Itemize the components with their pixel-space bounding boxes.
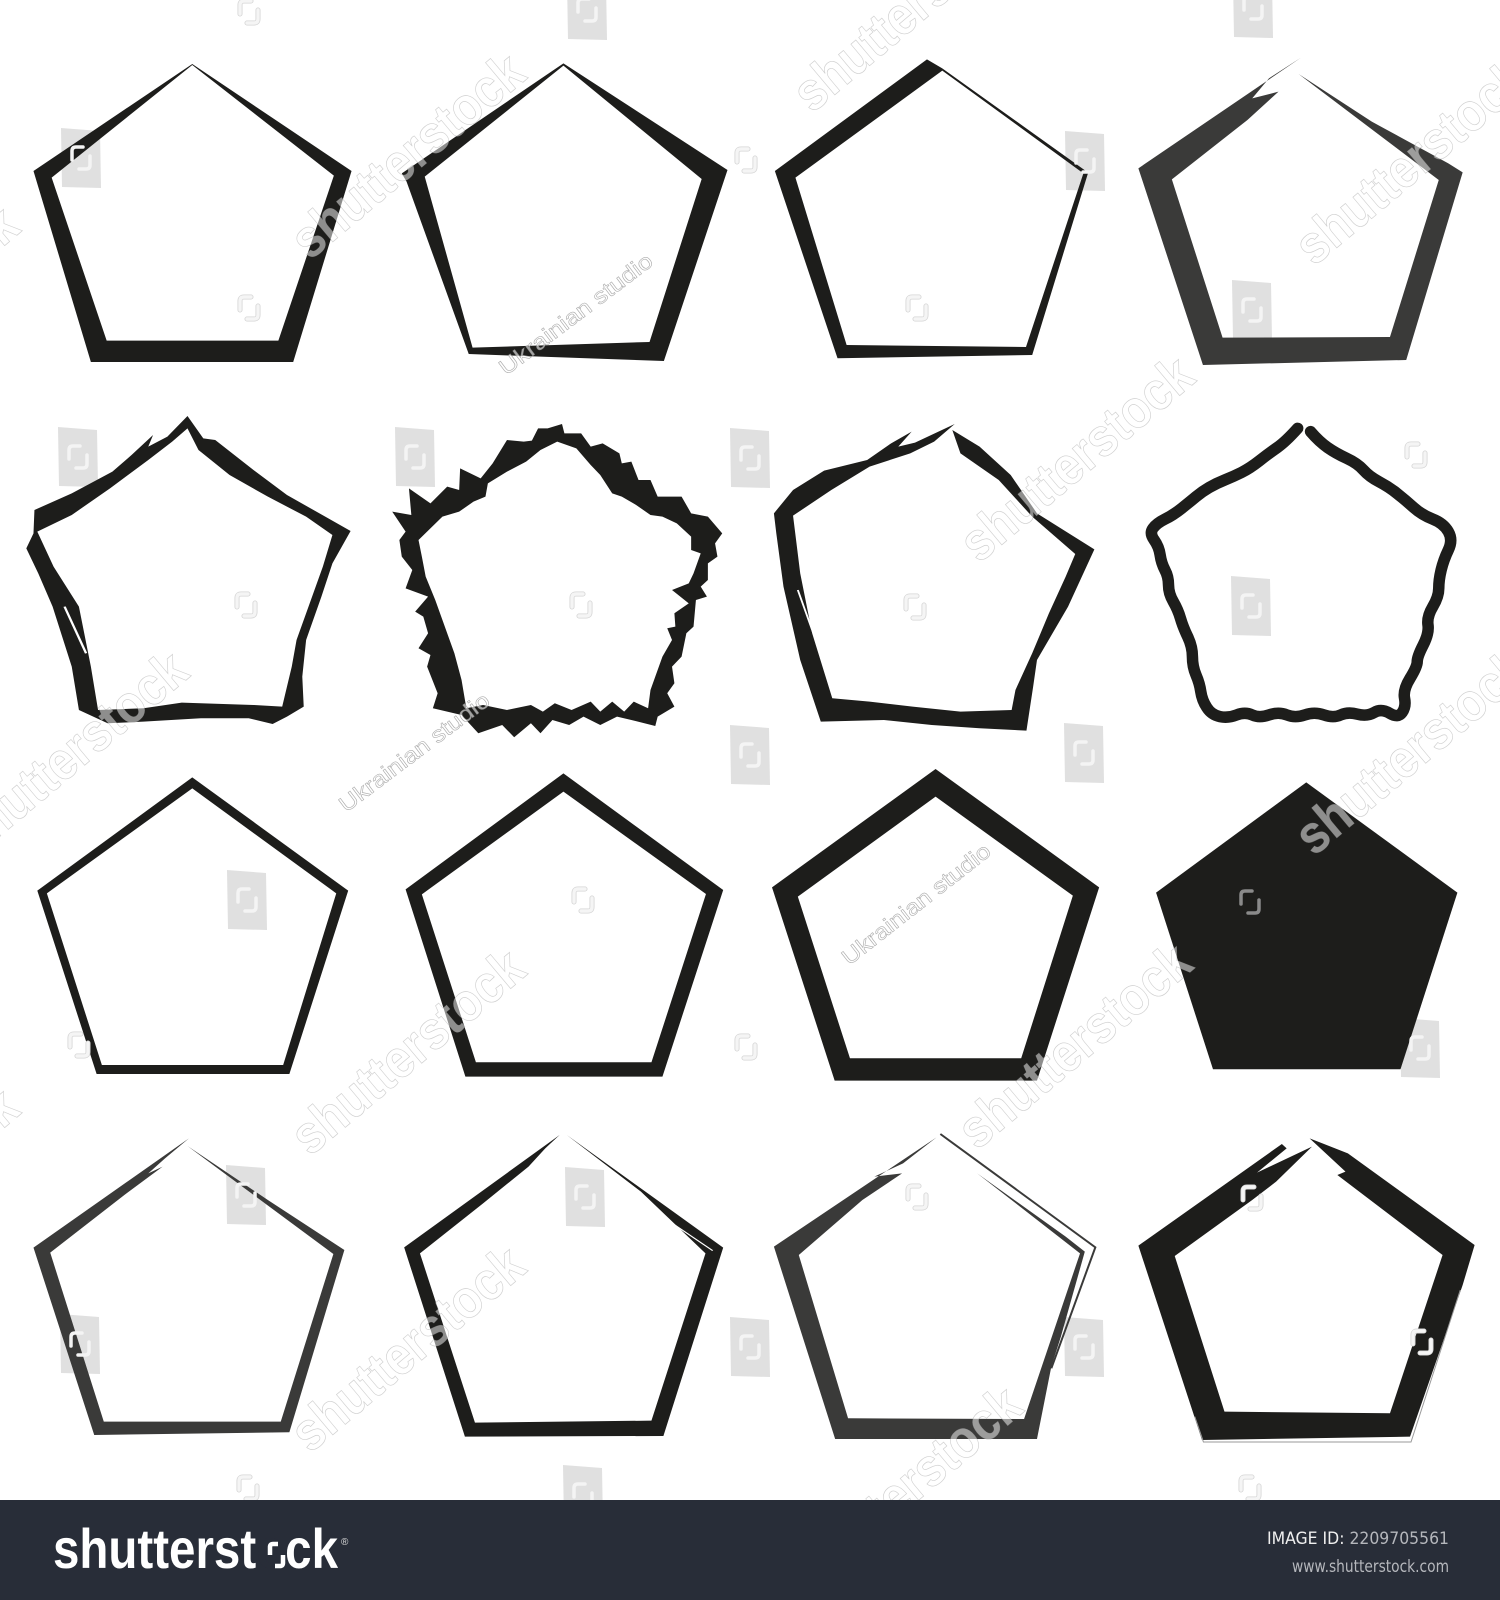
watermark Ukrainian studio diagonal text: Ukrainian studio (837, 838, 995, 970)
image id: IMAGE ID: 2209705561 (1267, 1529, 1449, 1548)
watermark Ukrainian studio diagonal text: Ukrainian studio (334, 687, 494, 817)
watermark Ukrainian studio diagonal text (334, 248, 995, 970)
pentagon row 2 column 2: jagged spiky frame (392, 424, 722, 737)
pentagon row 1 column 3: open top thin right frame (775, 59, 1088, 358)
pentagon row 3 column 1: thin regular frame (37, 777, 348, 1074)
footer band (0, 1500, 1500, 1600)
watermark shutterstock diagonal text: shutterstock (776, 1373, 1034, 1600)
pentagon row 2 column 4: wavy frame (1151, 428, 1451, 717)
pentagon row 1 column 2: skewed tapered frame (402, 63, 727, 361)
watermark shutterstock diagonal text: shutterstock (948, 343, 1206, 573)
pentagon row 4 column 4: heavy brush frame (1138, 1138, 1475, 1442)
watermark shutterstock diagonal text: shutterstock (279, 40, 537, 270)
pentagon row 1 column 1: tapered frame (33, 64, 352, 362)
pentagon row 1 column 4: grey brush frame (1138, 58, 1463, 365)
pentagon row 3 column 2: medium regular frame (406, 773, 723, 1077)
watermark shutterstock diagonal text: shutterstock (946, 930, 1204, 1160)
pentagon row 3 column 3: thick regular frame (772, 769, 1099, 1081)
pentagon row 4 column 3: grey brush double line frame (774, 1134, 1095, 1439)
pentagon row 4 column 1: grey brush thin frame (33, 1138, 344, 1435)
watermark Ukrainian studio diagonal text: Ukrainian studio (494, 248, 658, 380)
shutterstock logo: ® (341, 1537, 349, 1548)
website: www.shutterstock.com (1292, 1557, 1449, 1576)
pentagon row 2 column 3: rotated rough brush frame (774, 424, 1094, 731)
shutterstock logo: shutterstock (53, 1517, 339, 1580)
watermark shutterstock diagonal text: shutterstock (279, 1233, 537, 1463)
pentagon row 4 column 2: black brush frame (404, 1135, 723, 1437)
watermark shutterstock diagonal text: shutterstock (279, 936, 537, 1166)
pentagon row 3 column 4: solid filled (1156, 782, 1457, 1069)
pentagon row 2 column 1: rough brush frame (26, 416, 351, 724)
